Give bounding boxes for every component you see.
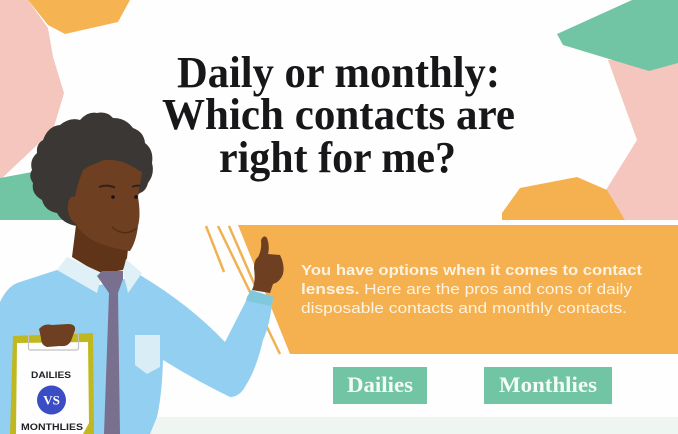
clipboard clip xyxy=(28,333,78,350)
banner text: disposable contacts and monthly contacts. xyxy=(301,300,627,317)
title: Which contacts are xyxy=(162,90,515,139)
shape: right green xyxy=(557,0,678,71)
clipboard label: dailies: DAILIES xyxy=(31,370,71,381)
button: dailies: Dailies xyxy=(347,372,413,397)
banner xyxy=(238,225,678,354)
shirt cuff xyxy=(246,290,274,306)
shape: right pink xyxy=(606,60,678,220)
vs badge: VS xyxy=(43,392,60,408)
button: monthlies xyxy=(484,367,612,404)
eyes and smile xyxy=(99,186,140,233)
banner text xyxy=(301,262,642,317)
neck xyxy=(72,225,129,274)
shirt pocket xyxy=(135,335,160,374)
face xyxy=(68,160,142,251)
button: dailies xyxy=(333,367,427,404)
shape: lower right orange xyxy=(502,177,625,220)
bottom pale band xyxy=(150,417,678,434)
title: right for me? xyxy=(219,133,456,182)
shape: left pink xyxy=(0,0,64,180)
tie xyxy=(97,271,123,434)
banner text: You have options when it comes to contact xyxy=(301,262,642,279)
banner text: lenses. Here are the pros and cons of daily xyxy=(301,281,633,298)
banner stripes xyxy=(206,226,280,354)
holding hand xyxy=(39,324,75,347)
button: monthlies: Monthlies xyxy=(499,372,597,397)
collar xyxy=(57,257,142,293)
title: Daily or monthly: xyxy=(177,48,500,97)
shape: top orange xyxy=(28,0,130,34)
clipboard label: monthlies: MONTHLIES xyxy=(21,422,83,433)
clipboard xyxy=(10,324,94,434)
hair xyxy=(30,113,153,226)
illustration: man xyxy=(0,113,284,434)
shirt xyxy=(0,270,273,434)
title xyxy=(162,48,515,182)
shape: left green xyxy=(0,172,70,220)
thumbs up hand xyxy=(252,236,284,293)
